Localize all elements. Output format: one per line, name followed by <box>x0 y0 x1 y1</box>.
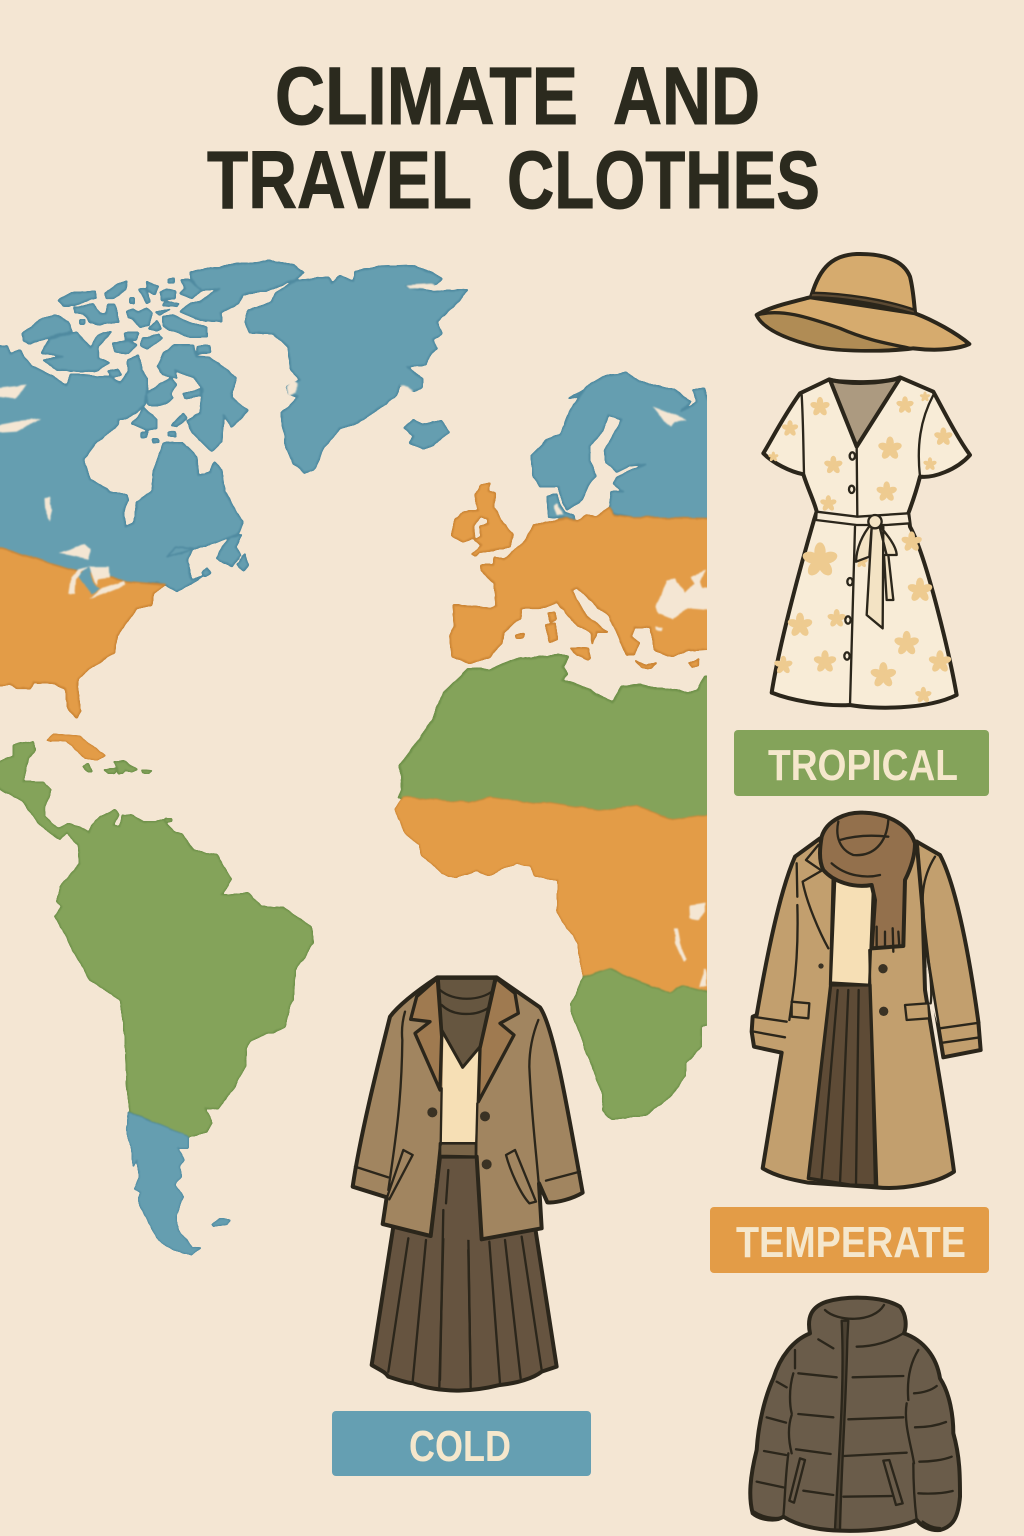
blazer details <box>355 1012 580 1380</box>
title: CLIMATE <box>275 51 578 142</box>
coat details <box>753 845 980 1187</box>
title <box>207 51 820 226</box>
title: TRAVEL <box>207 135 472 226</box>
region: cold scandinavia and russia <box>532 373 730 519</box>
scarf <box>820 813 915 948</box>
dress buttons <box>844 452 855 660</box>
coat right sleeve <box>917 842 981 1057</box>
region: temperate cuba <box>47 734 105 760</box>
cream top <box>831 880 873 985</box>
region: tropical central and south america <box>0 742 313 1137</box>
icon: sun hat <box>757 254 969 351</box>
title: AND <box>613 51 760 142</box>
icon: puffer jacket <box>750 1298 960 1531</box>
label: temperate <box>710 1207 989 1273</box>
label: cold <box>332 1411 591 1476</box>
dress belt and ties <box>816 512 910 628</box>
puffer pockets <box>789 1458 903 1505</box>
title: CLOTHES <box>507 135 820 226</box>
icon: trench coat with scarf <box>752 813 981 1188</box>
waistband <box>440 1143 476 1157</box>
dress flower print <box>768 391 953 703</box>
label: tropical: TROPICAL <box>768 741 958 790</box>
region: tropical north africa <box>398 654 707 820</box>
icon: floral dress <box>763 377 970 708</box>
coat buttons <box>818 963 888 1016</box>
region: cold patagonia <box>126 1112 231 1255</box>
dark inner top <box>438 978 495 1067</box>
label: cold: COLD <box>409 1422 511 1471</box>
world map <box>0 261 730 1255</box>
region: temperate north america <box>0 542 165 718</box>
cream top <box>442 1037 480 1143</box>
icon: blazer and pleated skirt <box>353 977 583 1391</box>
region: tropical southern africa <box>570 968 707 1120</box>
blazer <box>353 977 583 1239</box>
pleated skirt <box>808 985 877 1186</box>
puffer quilting <box>754 1305 953 1528</box>
region: cold north america and greenland <box>0 261 468 592</box>
region: temperate europe <box>450 483 730 668</box>
puffer zipper <box>835 1321 848 1530</box>
lapels <box>411 978 442 1090</box>
label: temperate: TEMPERATE <box>736 1218 966 1267</box>
label: tropical <box>734 730 989 796</box>
long skirt <box>372 1227 557 1391</box>
blazer buttons <box>427 1107 492 1169</box>
region: temperate central africa <box>395 797 730 997</box>
coat body <box>752 838 954 1188</box>
